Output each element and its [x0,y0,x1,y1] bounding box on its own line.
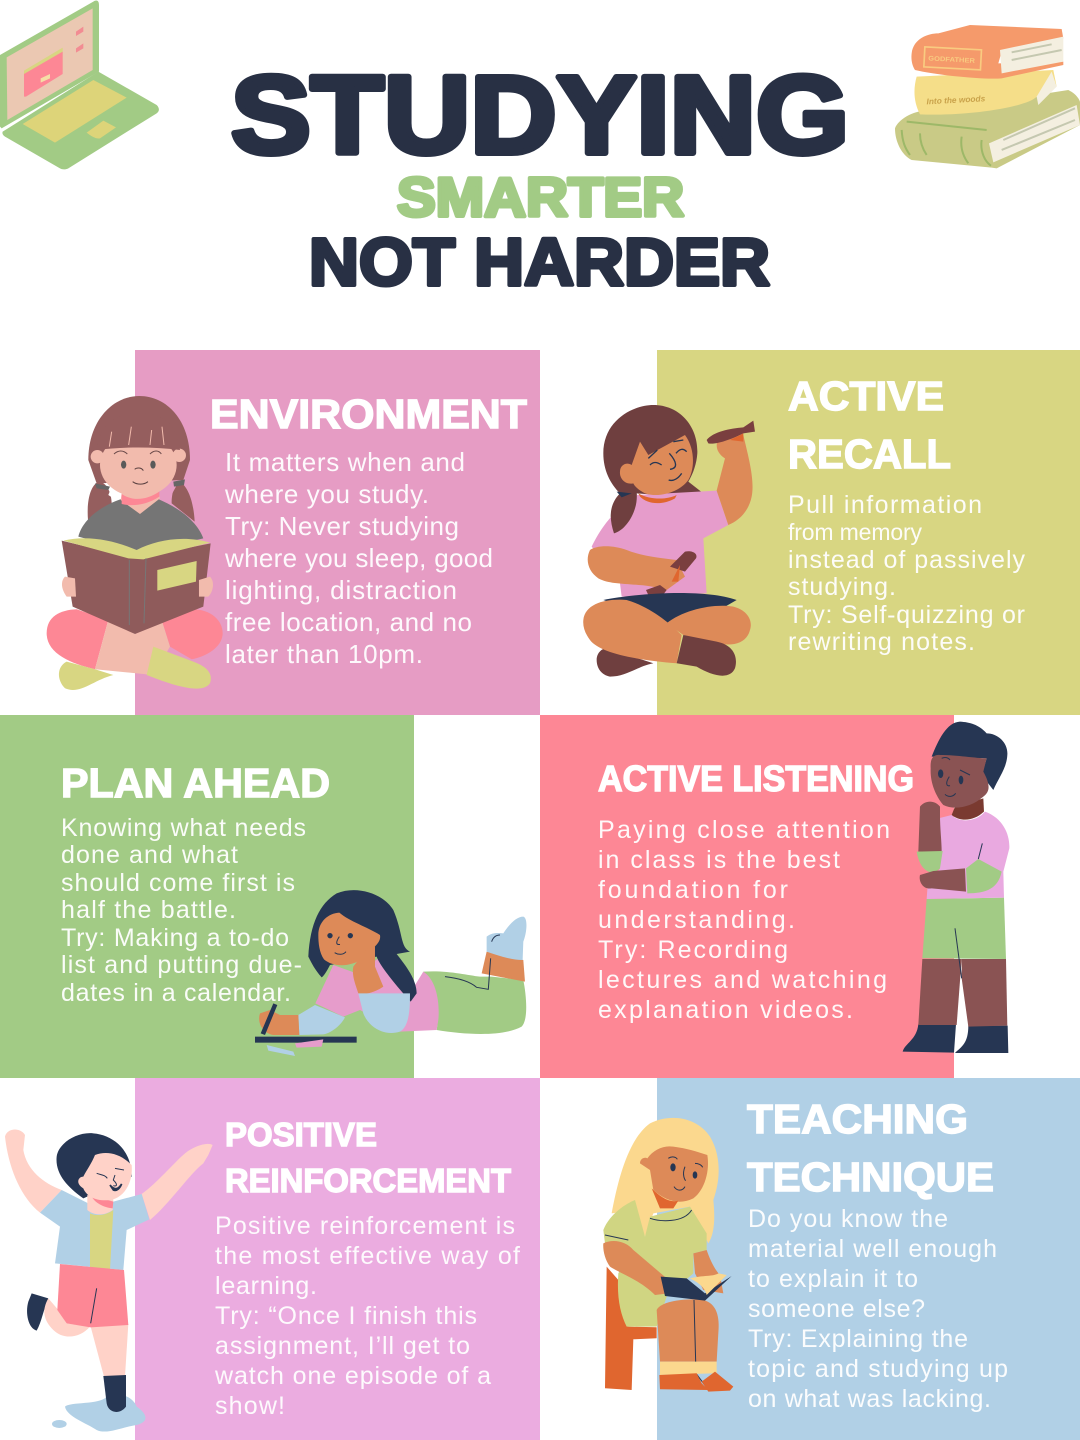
icon: stack of books: GODFATHER [928,55,975,65]
heading: positive reinforcement: REINFORCEMENT [225,1162,511,1199]
text block: positive reinforcement: Positive reinforcement is [215,1212,515,1240]
text block: plan ahead: Try: Making a to-do [61,924,289,952]
text block: active listening: explanation videos. [598,996,853,1024]
text block: positive reinforcement: assignment, I’ll get to [215,1332,470,1360]
text block: positive reinforcement: Try: “Once I finish this [215,1302,477,1330]
heading: positive reinforcement [225,1116,511,1199]
heading: teaching technique: TEACHING [747,1096,968,1142]
illustration: girl playing with toy planes [583,405,755,677]
text block: positive reinforcement: show! [215,1392,285,1420]
text block: active recall: from memory [788,519,922,545]
text block: environment: where you sleep, good [224,543,493,573]
text block: active listening [598,816,890,1024]
title [231,54,849,300]
text block: teaching technique: topic and studying up [748,1355,1008,1383]
icon: stack of books: Into the woods [926,93,986,106]
illustration: girl lying down drawing [255,890,526,1056]
title: NOT HARDER [309,225,770,300]
text block: plan ahead: should come first is [61,869,295,897]
illustration: boy jumping in puddle [5,1130,213,1432]
text block: active recall: instead of passively [788,546,1026,574]
text block: active listening: in class is the best [598,846,840,874]
text block: plan ahead: half the battle. [61,896,236,924]
text block: teaching technique: to explain it to [748,1265,918,1293]
heading: plan ahead: PLAN AHEAD [61,760,330,806]
text block: active recall: studying. [788,573,896,601]
text block: teaching technique: on what was lacking. [748,1385,991,1413]
icon: stack of books [895,25,1080,168]
panel: active recall [657,350,1080,715]
illustration: girl on chair reading [603,1118,733,1392]
text block: environment [224,447,493,669]
text block: environment: later than 10pm. [225,639,423,669]
text block: plan ahead: done and what [61,841,238,869]
text block: teaching technique: someone else? [748,1295,925,1323]
panel: teaching technique [657,1078,1080,1440]
text block: positive reinforcement: watch one episode of a [214,1362,491,1390]
illustration: girl reading open book [47,396,223,690]
heading: environment: ENVIRONMENT [210,391,527,437]
panel: active listening [540,715,954,1078]
text block: active recall: Try: Self-quizzing or [788,601,1025,629]
text block: active recall: Pull information [788,491,982,519]
icon: laptop [0,1,159,169]
text block: plan ahead [61,814,306,1007]
text block: teaching technique: Try: Explaining the [748,1325,968,1353]
text block: environment: lighting, distraction [225,575,457,605]
panel: positive reinforcement [135,1078,540,1440]
text block: plan ahead: list and putting due- [61,951,302,979]
text block: plan ahead: dates in a calendar. [61,979,291,1007]
text block: active recall: rewriting notes. [788,628,975,656]
text block: environment: Try: Never studying [225,511,459,541]
text block: active listening: understanding. [598,906,795,934]
text block: environment: It matters when and [225,447,465,477]
text block: positive reinforcement: learning. [215,1272,317,1300]
illustration: boy thinking with hand on chin [903,722,1009,1053]
heading: active recall [788,373,951,477]
text block: teaching technique: material well enough [748,1235,997,1263]
heading: teaching technique: TECHNIQUE [747,1154,994,1200]
heading: active recall: ACTIVE [788,373,944,419]
panel: environment [135,350,540,715]
title: SMARTER [397,166,684,228]
heading: teaching technique [747,1096,994,1200]
title: STUDYING [231,54,849,177]
heading: active recall: RECALL [788,431,951,477]
text block: teaching technique [748,1205,1008,1413]
text block: active recall [788,491,1026,656]
text block: plan ahead: Knowing what needs [61,814,306,842]
text block: active listening: Paying close attention [598,816,890,844]
heading: active listening: ACTIVE LISTENING [598,758,914,799]
text block: environment: where you study. [224,479,429,509]
text block: active listening: Try: Recording [598,936,788,964]
panel: plan ahead [0,715,414,1078]
text block: environment: free location, and no [225,607,472,637]
text block: positive reinforcement [214,1212,520,1420]
text block: positive reinforcement: the most effective way of [215,1242,520,1270]
text block: active listening: foundation for [598,876,788,904]
text block: active listening: lectures and watching [598,966,887,994]
heading: positive reinforcement: POSITIVE [225,1116,377,1153]
text block: teaching technique: Do you know the [748,1205,948,1233]
